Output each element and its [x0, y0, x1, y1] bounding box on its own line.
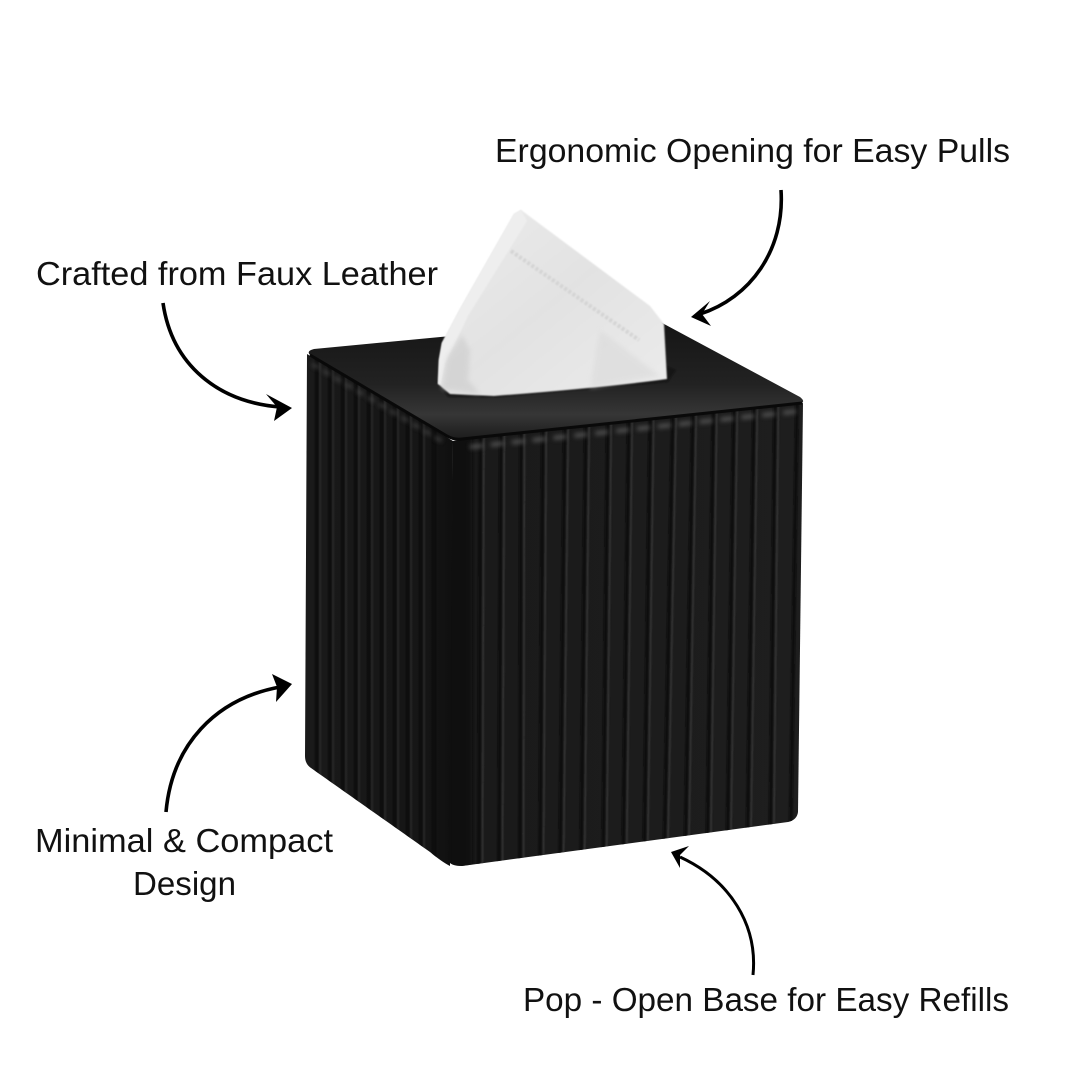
product: ribbed black tissue box: [300, 210, 810, 875]
rib highlights under lid: [312, 364, 800, 447]
arrow: ergonomic opening: [691, 190, 781, 326]
infographic canvas: [38, 138, 1009, 1018]
tissue: [438, 210, 667, 396]
arrow: minimal and compact: [166, 674, 292, 812]
box left face: [305, 354, 453, 866]
tissue slot: [436, 365, 676, 398]
lid front edge: [310, 355, 802, 439]
label: pop-open base: Pop - Open Base for Easy Refills: [523, 981, 1009, 1018]
label: minimal and compact design: Minimal & Compact: [35, 822, 333, 859]
arrow: faux leather: [163, 303, 292, 421]
label: minimal and compact design: [35, 822, 333, 902]
box front face: [445, 395, 810, 875]
label: minimal and compact design: Design: [133, 865, 236, 902]
arrow: pop-open base: [671, 846, 754, 975]
box lid: [309, 317, 803, 439]
front corner shadow: [450, 440, 474, 866]
label: ergonomic opening: Ergonomic Opening for Easy Pulls: [495, 132, 1010, 169]
label: faux leather: Crafted from Faux Leather: [36, 255, 438, 292]
